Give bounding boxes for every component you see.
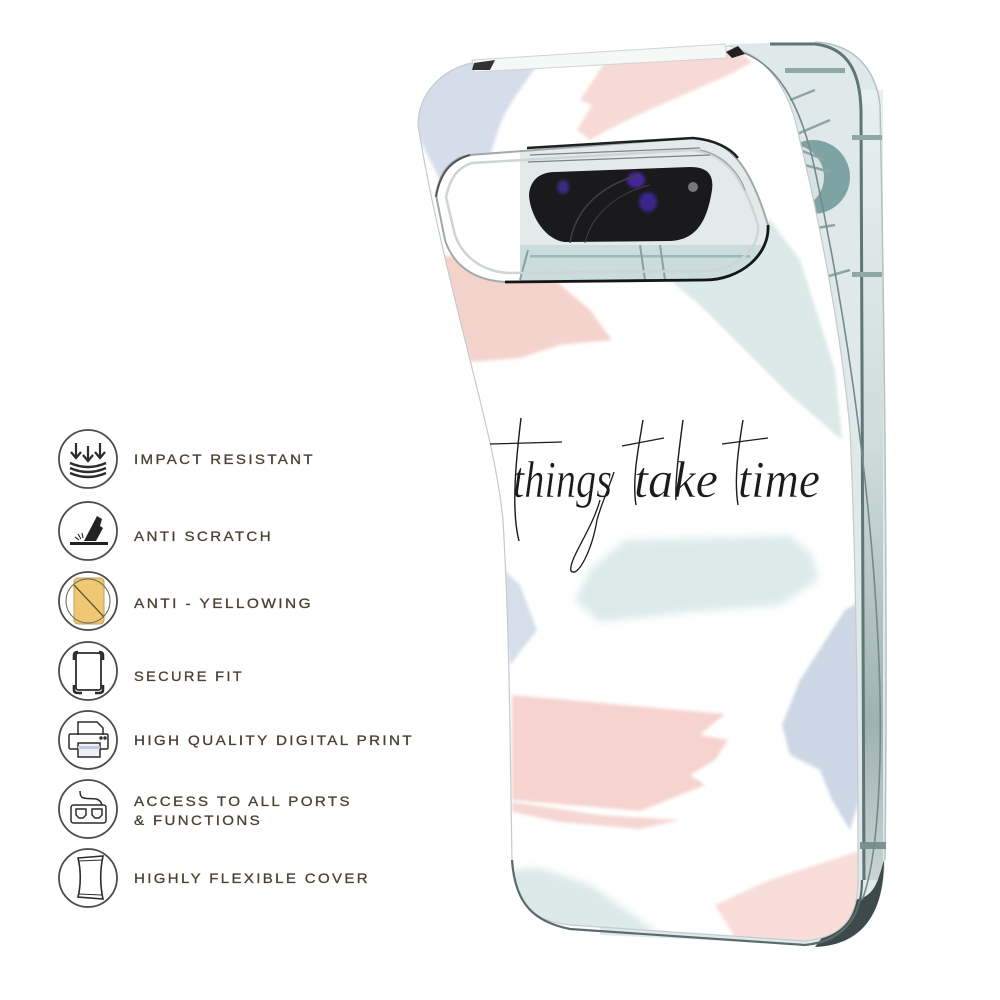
label: SECURE FIT: [134, 668, 244, 684]
feature list: [59, 430, 414, 907]
slogan script: time: [738, 452, 820, 509]
label: HIGHLY FLEXIBLE COVER: [134, 870, 370, 886]
label: ACCESS TO ALL PORTS: [134, 793, 352, 809]
feature: impact resistant: [59, 430, 315, 488]
feature: digital print: [59, 711, 414, 769]
brush: pink bottom right: [715, 850, 858, 940]
camera cutout: [436, 135, 775, 285]
camera lens bar: [529, 167, 712, 243]
brush: pink left: [440, 255, 612, 362]
label: IMPACT RESISTANT: [134, 451, 315, 467]
icon: bent cover: [59, 849, 117, 907]
feature: ports: [59, 780, 352, 838]
case outline: [418, 46, 858, 941]
camera pill rim: [436, 138, 768, 282]
feature: secure fit: [59, 642, 244, 700]
label: HIGH QUALITY DIGITAL PRINT: [134, 732, 414, 748]
phone product: [410, 42, 886, 950]
feature: flexible: [59, 849, 370, 907]
brush: teal centre: [575, 536, 818, 622]
brush: pink top: [577, 48, 752, 140]
brush: blue left small: [506, 572, 538, 664]
printed case back: [410, 44, 880, 950]
icon: printer: [59, 711, 117, 769]
label: ANTI SCRATCH: [134, 528, 273, 544]
label: ANTI - YELLOWING: [134, 595, 313, 611]
icon: ports: [59, 780, 117, 838]
icon: impact arrows: [59, 430, 117, 488]
phone behind the case: [600, 42, 886, 947]
icon: phone with bumpers: [59, 642, 117, 700]
brush: blue right: [782, 600, 862, 830]
slogan script: things: [513, 452, 612, 509]
icon: blade scratch: [59, 502, 117, 560]
feature: anti scratch: [59, 502, 273, 560]
slogan script: [490, 418, 820, 572]
brush: teal right: [670, 220, 842, 440]
feature: ports: & FUNCTIONS: [134, 812, 262, 828]
icon: yellow phone: [59, 572, 117, 630]
feature: anti yellowing: [59, 572, 313, 630]
brush: blue top left: [418, 64, 536, 180]
brush: pink lower: [512, 695, 728, 811]
brush: teal bottom left: [514, 866, 656, 930]
slogan script: take: [634, 452, 718, 509]
